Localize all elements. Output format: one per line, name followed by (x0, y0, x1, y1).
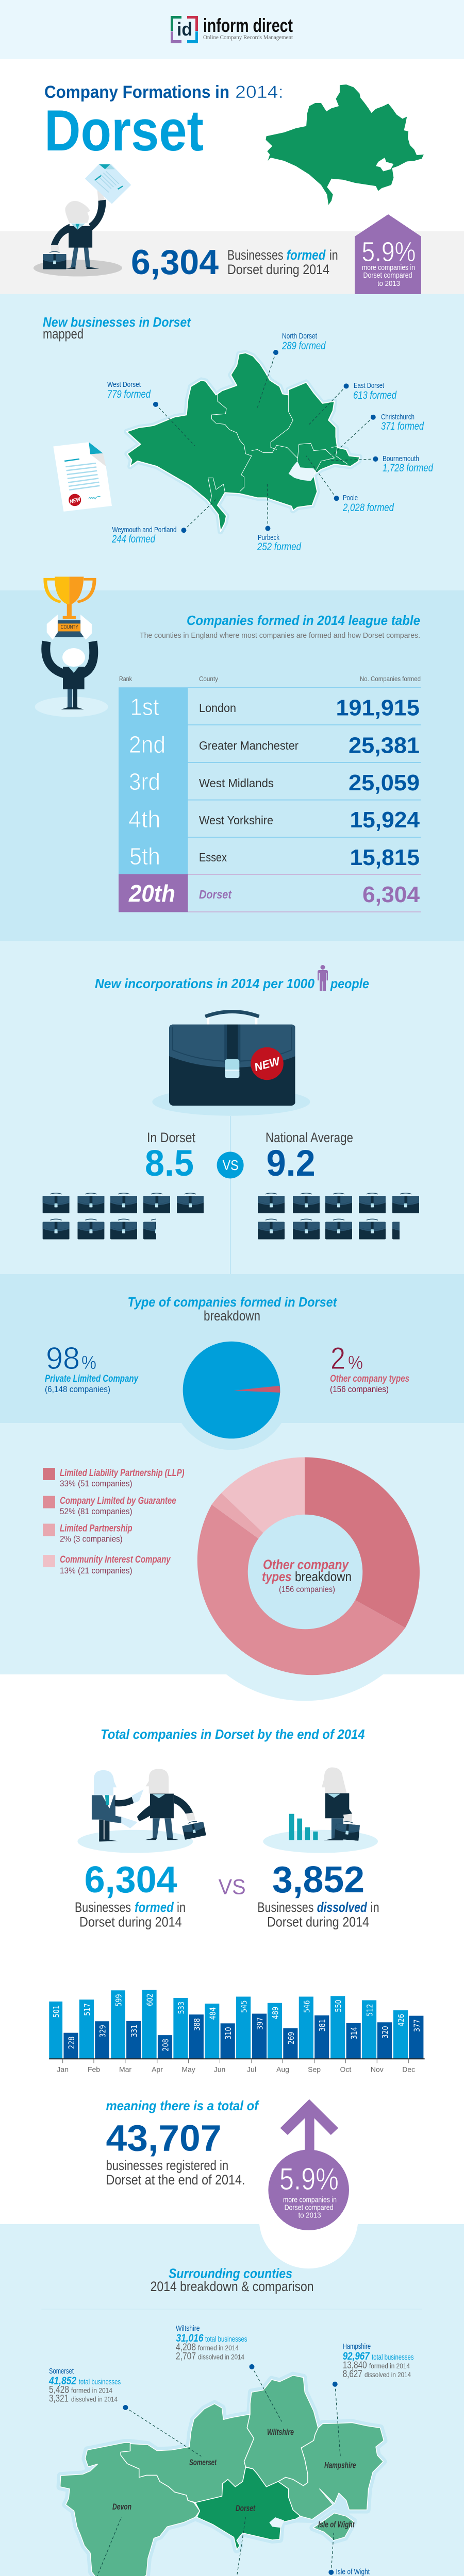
icon: large briefcase with new sticker (152, 1012, 310, 1116)
map names: county labels: Somerset (189, 2458, 217, 2467)
row: London: 191,915 (336, 696, 420, 720)
stat: 3,852 dissolved: in (371, 1900, 379, 1915)
stat: 98% private limited: Private Limited Company (45, 1374, 139, 1384)
row: London: 1st (130, 693, 159, 720)
chart: monthly formed vs dissolved bars: Dec (402, 2065, 415, 2074)
chart: monthly formed vs dissolved bars: 550 (334, 1999, 343, 2012)
icon: VS badge: VS (223, 1157, 239, 1173)
stat: 3,852 dissolved: dissolved (317, 1900, 367, 1915)
chart: monthly formed vs dissolved bars: 397 (255, 2018, 265, 2030)
row: West Yorkshire: West Yorkshire (199, 814, 273, 827)
chart: monthly formed vs dissolved bars: 314 (349, 2027, 359, 2039)
icon: large briefcase with new sticker: NEW (253, 1054, 282, 1074)
label: Purbeck: 252 formed (257, 541, 302, 553)
label: Wiltshire stats: dissolved in 2014 (198, 2353, 244, 2361)
label: Christchurch: Christchurch (381, 413, 415, 421)
label: Somerset stats: formed in 2014 (71, 2386, 112, 2394)
legend: LLP: 33% (51 companies) (60, 1479, 132, 1488)
text: VS: VS (219, 1875, 246, 1899)
chart: monthly formed vs dissolved bars: 310 (223, 2027, 233, 2040)
row: London: London (199, 701, 236, 715)
stat: 3,852 dissolved: Dorset during 2014 (267, 1914, 369, 1930)
chart: monthly formed vs dissolved bars: 484 (208, 2007, 218, 2020)
chart: monthly formed vs dissolved bars: 377 (412, 2020, 422, 2032)
stat: 2% other types: % (348, 1352, 363, 1373)
row: Dorset: 20th (128, 880, 175, 907)
label: Hampshire stats: 8,627 (343, 2369, 362, 2380)
label: Hampshire stats (343, 2342, 413, 2380)
callout: arrow with 5.9% growth: Dorset compared (285, 2204, 334, 2212)
chart: monthly formed vs dissolved bars: 331 (129, 2025, 139, 2037)
stat: total of 43,707 businesses: Dorset at the end of 2014. (106, 2172, 245, 2188)
heading: new businesses in Dorset mapped: New businesses in Dorset (43, 314, 191, 330)
callout: 5.9% more companies: 5.9% (362, 236, 416, 267)
label: Wiltshire stats (176, 2324, 247, 2362)
heading: surrounding counties: 2014 breakdown & comparison (151, 2279, 314, 2294)
stat: National Average 9.2: National Average (266, 1130, 353, 1145)
table header (119, 675, 421, 683)
label: Wiltshire stats: Wiltshire (176, 2324, 200, 2333)
panel: type of companies (0, 1274, 464, 1423)
panel: title area (0, 59, 464, 231)
row: West Midlands: 3rd (129, 768, 160, 795)
label: Purbeck (257, 533, 302, 553)
label: Weymouth and Portland: 244 formed (111, 533, 156, 545)
chart: monthly formed vs dissolved bars: Sep (308, 2065, 321, 2074)
row: Essex: 15,815 (350, 845, 420, 870)
stat: total of 43,707 businesses (106, 2098, 259, 2188)
label: Purbeck: Purbeck (258, 533, 279, 542)
label: East Dorset: East Dorset (354, 381, 385, 390)
heading: companies formed league table: Companies formed in 2014 league table (187, 613, 420, 628)
map names: county labels: Wiltshire (267, 2427, 294, 2437)
label: Poole: Poole (343, 494, 358, 502)
chart: other company types donut: Other company (263, 1557, 349, 1572)
chart: monthly formed vs dissolved bars: 269 (286, 2032, 296, 2044)
row: West Midlands: West Midlands (199, 776, 274, 790)
chart: company type pie (181, 1342, 281, 1450)
stat: total of 43,707 businesses: businesses registered in (106, 2158, 228, 2173)
stat: 6,304 businesses formed: Businesses (227, 247, 284, 263)
label: Wiltshire stats: 4,208 (176, 2342, 196, 2353)
row: Essex: 5th (129, 843, 160, 870)
row: Dorset: 6,304 (362, 882, 420, 907)
row: West Midlands: 25,059 (349, 770, 420, 795)
chart: monthly formed vs dissolved bars: Jun (214, 2065, 225, 2074)
stat: total of 43,707 businesses: meaning there is a total of (106, 2098, 259, 2113)
table header: County (199, 675, 218, 683)
chart: monthly formed vs dissolved bars: 599 (113, 1994, 124, 2007)
chart: monthly formed vs dissolved bars: 545 (239, 2000, 249, 2013)
label: Isle of Wight stats: Isle of Wight (336, 2568, 370, 2576)
label: West Dorset (107, 380, 151, 400)
heading: new incorporations per 1000 people: people (330, 976, 369, 991)
icon: NEW sticker text on document: NEW (69, 496, 82, 505)
label: Poole (342, 494, 394, 514)
chart: monthly formed vs dissolved bars: 388 (192, 2018, 202, 2031)
panel: new incorporations per 1000 people (0, 941, 464, 1274)
illustration: businessmen shaking hands (77, 1769, 206, 1853)
label: Isle of Wight stats (336, 2568, 402, 2576)
label: Poole: 2,028 formed (342, 502, 394, 514)
stat: National Average 9.2: 9.2 (267, 1143, 316, 1184)
label: North Dorset (281, 332, 326, 352)
panel: total companies (0, 1674, 464, 2224)
legend: guarantee: Company Limited by Guarantee (60, 1496, 176, 1506)
heading: companies formed league table: The counties in England where most companies are formed and how Dorset compares. (140, 631, 420, 640)
stat: 6,304 businesses formed: Dorset during 2014 (227, 262, 329, 277)
chart: monthly formed vs dissolved bars: May (181, 2065, 195, 2074)
callout: 5.9% more companies: to 2013 (377, 279, 400, 288)
row: Greater Manchester: Greater Manchester (199, 739, 299, 752)
stat: 6,304 formed: 6,304 (85, 1859, 177, 1901)
stat: 6,304 formed: in (177, 1900, 186, 1915)
table: companies formed in 2014 (119, 675, 421, 912)
map names: county labels: Devon (112, 2502, 131, 2512)
chart: monthly formed vs dissolved bars: 517 (82, 2003, 92, 2016)
legend: other company types (43, 1468, 185, 1575)
callout: 5.9% more companies (355, 214, 421, 294)
chart: other company types donut: types (262, 1569, 291, 1584)
label: East Dorset: 613 formed (353, 389, 397, 401)
stat: 3,852 dissolved: 3,852 (272, 1859, 364, 1901)
heading: new businesses in Dorset mapped: mapped (43, 326, 84, 342)
callout: arrow with 5.9% growth: to 2013 (299, 2211, 321, 2220)
heading: surrounding counties (151, 2265, 314, 2294)
chart: monthly formed vs dissolved bars: Nov (371, 2065, 384, 2074)
legend: LLP (43, 1468, 185, 1488)
legend: limited partnership (43, 1523, 132, 1544)
row: Dorset: Dorset (199, 888, 232, 901)
heading: total companies in Dorset: Total companies in Dorset by the end of 2014 (101, 1726, 365, 1742)
chart: monthly formed vs dissolved bars (49, 1990, 425, 2074)
stat: 2% other types (330, 1341, 409, 1394)
label: Christchurch (381, 413, 424, 432)
stat: 6,304 businesses formed: in (329, 247, 338, 263)
label: Hampshire stats: 92,967 (343, 2350, 370, 2362)
legend: guarantee: 52% (81 companies) (60, 1506, 132, 1516)
stat: 6,304 businesses formed: 6,304 (131, 243, 219, 282)
panel: header band (0, 0, 464, 59)
label: Somerset stats (48, 2367, 121, 2404)
chart: monthly formed vs dissolved bars: Jul (247, 2065, 256, 2074)
stat: total of 43,707 businesses: 43,707 (106, 2119, 222, 2159)
stat: National Average 9.2 (266, 1130, 353, 1184)
icon: briefcase at feet (43, 251, 67, 269)
logo: inform direct: Online Company Records Management (203, 33, 293, 41)
title: Company Formations in 2014: 2014: (235, 82, 284, 102)
legend: limited partnership: Limited Partnership (60, 1523, 132, 1534)
panel: surrounding counties (0, 2224, 464, 2576)
stat: 6,304 formed: Dorset during 2014 (79, 1914, 182, 1930)
logo: inform direct (171, 15, 293, 43)
chart: monthly formed vs dissolved bars: 512 (365, 2004, 374, 2016)
heading: type of companies formed (128, 1294, 338, 1324)
chart: monthly formed vs dissolved bars: Apr (152, 2065, 163, 2074)
title: Company Formations in 2014: Company Formations in (44, 82, 229, 102)
stat: In Dorset 8.5: In Dorset (147, 1130, 195, 1145)
chart: monthly formed vs dissolved bars: Jan (57, 2065, 69, 2074)
icon: new document (53, 442, 112, 512)
row: Greater Manchester: 25,381 (349, 733, 420, 758)
label: North Dorset: 289 formed (281, 340, 326, 352)
label: Wiltshire stats: formed in 2014 (198, 2344, 239, 2352)
stat: 6,304 businesses formed (131, 243, 338, 282)
stat: 98% private limited: % (81, 1352, 96, 1373)
divider line (230, 1116, 231, 1274)
stat: 3,852 dissolved: Businesses (257, 1900, 313, 1915)
heading: new businesses in Dorset mapped (43, 314, 191, 342)
label: Wiltshire stats: 31,016 (176, 2332, 204, 2344)
callout: 5.9% more companies: Dorset compared (363, 271, 412, 280)
stat: 2% other types: 2 (330, 1341, 345, 1376)
row: West Midlands (129, 768, 420, 795)
chart: monthly formed vs dissolved bars: 381 (318, 2019, 327, 2031)
stat: 98% private limited (45, 1341, 139, 1394)
chart: other company types donut (197, 1457, 420, 1701)
row: West Yorkshire: 4th (128, 806, 161, 833)
label: Hampshire stats: formed in 2014 (369, 2362, 410, 2370)
label: Christchurch: 371 formed (381, 420, 424, 432)
chart: other company types donut: breakdown (295, 1569, 352, 1584)
logo: inform direct: inform direct (203, 15, 293, 36)
stat: 3,852 dissolved (257, 1859, 379, 1930)
row: Greater Manchester: 2nd (129, 731, 165, 758)
illustration: man holding county trophy (35, 577, 108, 717)
panel: other company types (0, 1423, 464, 1674)
stat: 2% other types: (156 companies) (330, 1384, 389, 1394)
icon: VS badge (217, 1152, 244, 1179)
stat: 98% private limited: (6,148 companies) (45, 1384, 110, 1394)
map: Dorset silhouette (266, 84, 424, 205)
label: Somerset stats: total businesses (79, 2378, 121, 2386)
title: Dorset: Dorset (44, 98, 204, 163)
legend: community interest: 13% (21 companies) (60, 1566, 132, 1575)
label: North Dorset: North Dorset (282, 332, 318, 341)
map: Dorset and surrounding counties (41, 2309, 422, 2576)
label: Wiltshire stats: total businesses (205, 2335, 247, 2344)
pictogram: Dorset briefcases 8.5 (43, 1193, 204, 1240)
callout: arrow with 5.9% growth (259, 2099, 358, 2268)
stat: 98% private limited: 98 (46, 1341, 80, 1376)
row: Dorset (128, 880, 420, 907)
map names: county labels (112, 2427, 356, 2530)
row: Greater Manchester (129, 731, 420, 758)
panel: companies formed league table (0, 590, 464, 941)
chart: monthly formed vs dissolved bars: 489 (270, 2007, 280, 2019)
label: West Dorset: 779 formed (107, 388, 151, 400)
heading: new incorporations per 1000 people: New incorporations in 2014 per 1000 (95, 976, 315, 991)
stat: In Dorset 8.5: 8.5 (145, 1143, 194, 1184)
heading: type of companies formed: breakdown (204, 1308, 260, 1324)
heading: type of companies formed: Type of companies formed in Dorset (128, 1294, 338, 1310)
logo: inform direct: id (177, 19, 192, 40)
label: Somerset stats: 5,428 (49, 2384, 69, 2395)
chart: monthly formed vs dissolved bars: 329 (98, 2025, 107, 2038)
legend: guarantee (43, 1496, 176, 1516)
label: West Dorset: West Dorset (107, 380, 141, 389)
heading: new incorporations per 1000 people (95, 965, 369, 991)
map: Dorset districts (127, 350, 378, 533)
map names: county labels: Isle of Wight (318, 2520, 355, 2530)
stat: 6,304 formed: Businesses (75, 1900, 131, 1915)
label: Hampshire stats: total businesses (372, 2353, 413, 2362)
label: Bournemouth: Bournemouth (383, 454, 419, 463)
chart: monthly formed vs dissolved bars: Aug (276, 2065, 289, 2074)
callout: arrow with 5.9% growth: 5.9% (279, 2162, 339, 2196)
label: Somerset stats: dissolved in 2014 (71, 2395, 118, 2403)
stat: 6,304 businesses formed: formed (287, 247, 326, 263)
chart: monthly formed vs dissolved bars: 546 (302, 2000, 311, 2013)
label: Bournemouth: 1,728 formed (383, 462, 434, 474)
chart: monthly formed vs dissolved bars: Oct (340, 2065, 351, 2074)
label: Wiltshire stats: 2,707 (176, 2351, 196, 2362)
chart: other company types donut: (156 companies) (279, 1585, 335, 1594)
row: Essex (129, 843, 420, 870)
legend: community interest (43, 1554, 171, 1575)
label: East Dorset (353, 381, 397, 401)
chart: monthly formed vs dissolved bars: 533 (176, 2002, 186, 2014)
chart: monthly formed vs dissolved bars: 208 (161, 2039, 170, 2052)
legend: limited partnership: 2% (3 companies) (60, 1534, 123, 1544)
label: Hampshire stats: Hampshire (343, 2342, 371, 2351)
label: Somerset stats: 3,321 (49, 2394, 69, 2404)
table header: No. Companies formed (360, 675, 421, 683)
heading: companies formed league table (140, 613, 420, 640)
row: London (130, 693, 420, 720)
chart: monthly formed vs dissolved bars: 228 (67, 2037, 76, 2049)
stat: 2% other types: Other company types (330, 1374, 409, 1384)
legend: community interest: Community Interest Company (60, 1554, 171, 1565)
callout: 5.9% more companies: more companies in (362, 263, 415, 272)
callout: arrow with 5.9% growth: more companies in (283, 2196, 337, 2204)
label: Somerset stats: 41,852 (48, 2375, 76, 2387)
label: Bournemouth (383, 454, 434, 474)
panel: new businesses map (0, 294, 464, 590)
label: Hampshire stats: 13,840 (343, 2360, 367, 2371)
chart: monthly formed vs dissolved bars: Mar (119, 2065, 131, 2074)
heading: surrounding counties: Surrounding counties (169, 2265, 292, 2281)
legend: LLP: Limited Liability Partnership (LLP) (60, 1468, 185, 1479)
chart: monthly formed vs dissolved bars: 426 (396, 2014, 406, 2027)
illustration: man holding county trophy: COUNTY (61, 624, 78, 631)
label: Somerset stats: Somerset (49, 2367, 74, 2376)
illustration: businessman with falling bars (263, 1768, 378, 1853)
illustration: businessman holding document (34, 164, 131, 277)
row: West Yorkshire (128, 806, 420, 833)
chart: monthly formed vs dissolved bars: 501 (52, 2005, 61, 2018)
label: Weymouth and Portland (111, 526, 176, 545)
pictogram: national briefcases 9.2 (258, 1193, 419, 1240)
stat: 6,304 formed: formed (135, 1900, 174, 1915)
label: Weymouth and Portland: Weymouth and Portland (112, 526, 176, 534)
chart: monthly formed vs dissolved bars: Feb (88, 2065, 100, 2074)
row: West Yorkshire: 15,924 (350, 807, 420, 833)
table header: Rank (119, 675, 132, 683)
stat: 6,304 formed (75, 1859, 186, 1930)
label: Hampshire stats: dissolved in 2014 (364, 2370, 411, 2379)
map names: county labels: Hampshire (324, 2461, 356, 2470)
panel: headline stat band (0, 231, 464, 294)
map names: county labels: Dorset (236, 2503, 256, 2513)
chart: monthly formed vs dissolved bars: 320 (380, 2026, 390, 2039)
chart: monthly formed vs dissolved bars: 602 (145, 1993, 155, 2006)
row: Essex: Essex (199, 851, 227, 864)
